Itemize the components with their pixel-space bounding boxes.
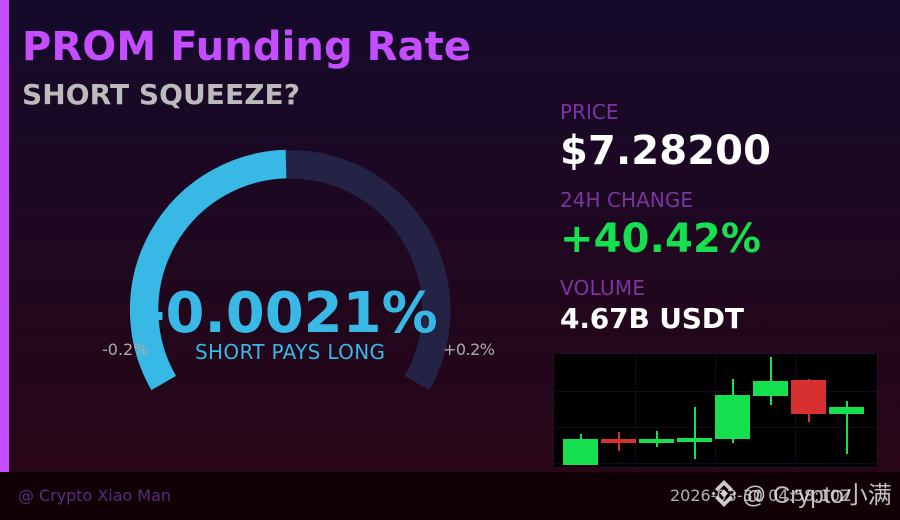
- watermark text: @ Crypto小满: [742, 482, 892, 509]
- price value: $7.28200: [560, 128, 771, 174]
- footer bar: [0, 472, 900, 520]
- candle 8: [829, 401, 864, 454]
- candle 6: [753, 357, 788, 405]
- gauge value arc: [144, 164, 286, 383]
- gauge track: [144, 164, 436, 383]
- gauge status label: SHORT PAYS LONG: [195, 340, 385, 364]
- candle 2: [601, 432, 636, 451]
- price label: PRICE: [560, 100, 618, 124]
- gauge maximum label: +0.2%: [443, 340, 495, 359]
- candlestick chart: [554, 354, 878, 468]
- change label: 24H CHANGE: [560, 188, 693, 212]
- watermark: [712, 480, 892, 509]
- volume value: 4.67B USDT: [560, 302, 744, 335]
- footer credit: @ Crypto Xiao Man: [18, 486, 171, 505]
- candle 4: [677, 407, 712, 459]
- candle 5: [715, 379, 750, 443]
- subtitle: SHORT SQUEEZE?: [22, 78, 300, 111]
- footer timestamp: 2026-03-30 04:58:10Z: [670, 486, 851, 505]
- funding rate value: -0.0021%: [142, 281, 438, 346]
- candle 7: [791, 379, 826, 422]
- volume label: VOLUME: [560, 276, 645, 300]
- icon: binance logo: [712, 480, 736, 507]
- candle 1: [563, 434, 598, 465]
- gauge minimum label: -0.2%: [102, 340, 148, 359]
- accent bar: [0, 0, 9, 472]
- change value: +40.42%: [560, 216, 761, 262]
- stats panel: [560, 100, 771, 335]
- candle 3: [639, 431, 674, 447]
- gauge: [102, 164, 495, 383]
- title: PROM Funding Rate: [22, 24, 471, 70]
